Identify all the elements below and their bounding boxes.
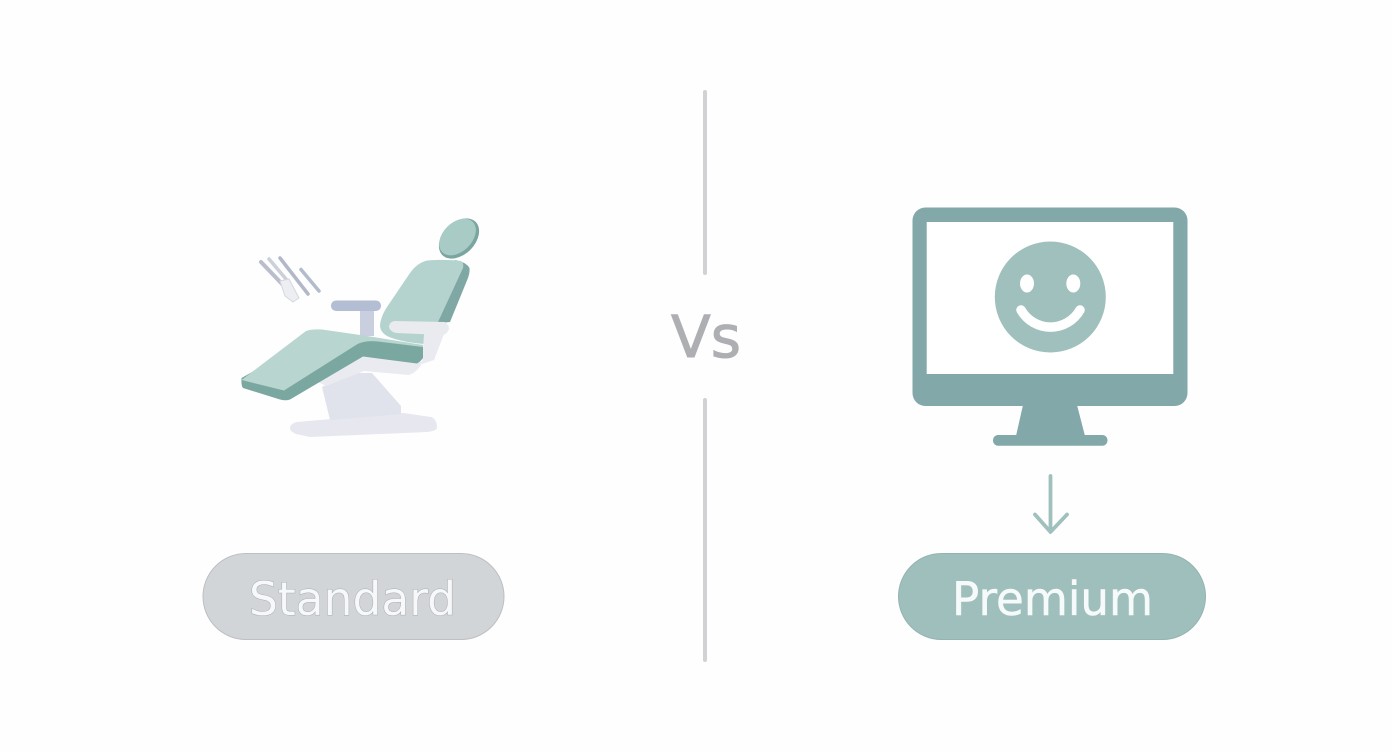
smiley face — [995, 242, 1106, 352]
divider: bottom line — [703, 398, 707, 662]
pill: Premium — [898, 554, 1206, 640]
arrow: monitor to Premium — [1035, 476, 1067, 532]
icon: monitor with smiley — [912, 208, 1188, 446]
label: Standard: Standard — [249, 572, 456, 626]
chair seat top — [242, 329, 423, 390]
heading: Vs: Vs — [671, 304, 741, 371]
monitor frame — [912, 208, 1188, 406]
monitor screen — [927, 222, 1173, 374]
chair arm post — [360, 309, 374, 336]
chair back side — [430, 260, 470, 324]
label: Premium: Premium — [952, 572, 1153, 626]
divider: top line — [703, 90, 707, 275]
icon: dental chair — [241, 211, 487, 437]
chair foot plate — [290, 413, 437, 437]
chair seat side — [241, 338, 423, 400]
monitor stand — [1016, 405, 1085, 436]
dental instruments — [261, 258, 319, 302]
pill: Standard — [203, 554, 504, 640]
chair grey arm bar — [331, 300, 381, 311]
chair backrest — [380, 260, 463, 344]
monitor base — [993, 435, 1108, 446]
chair armrest — [389, 321, 449, 335]
chair headrest — [431, 211, 487, 266]
chair pedestal — [322, 373, 401, 420]
chair arm support — [422, 334, 444, 364]
chair under seat — [318, 354, 423, 386]
